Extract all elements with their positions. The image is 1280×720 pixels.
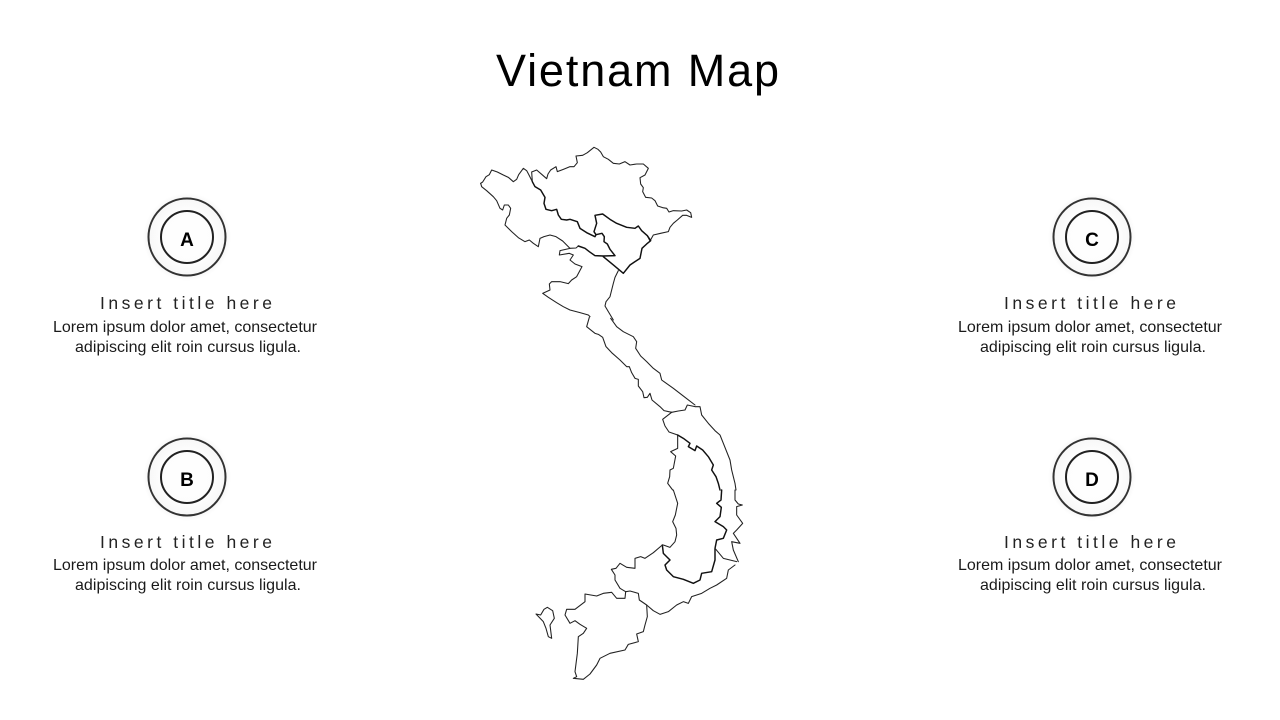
map: Phu Quoc island (536, 607, 554, 638)
text block B (53, 557, 318, 594)
map of Vietnam (481, 147, 743, 679)
map: southern regions (565, 490, 743, 679)
icon: circle D (1048, 433, 1136, 521)
icon: circle C: C (1085, 230, 1099, 251)
text block A (53, 319, 318, 356)
item B (53, 433, 318, 594)
heading D: Insert title here (1004, 532, 1176, 552)
text block D: Lorem ipsum dolor amet, consectetur (958, 557, 1223, 574)
text block A: Lorem ipsum dolor amet, consectetur (53, 319, 318, 336)
heading A: Insert title here (100, 293, 272, 313)
text block D: adipiscing elit roin cursus ligula. (980, 577, 1206, 594)
icon: circle A: A (180, 230, 194, 251)
icon: circle A (143, 193, 231, 281)
heading B: Insert title here (100, 532, 272, 552)
icon: circle B (143, 433, 231, 521)
text block B: adipiscing elit roin cursus ligula. (75, 577, 301, 594)
map: central regions (587, 317, 736, 490)
text block B: Lorem ipsum dolor amet, consectetur (53, 557, 318, 574)
text block A: adipiscing elit roin cursus ligula. (75, 339, 301, 356)
map: northern regions (481, 147, 692, 320)
text block C: adipiscing elit roin cursus ligula. (980, 339, 1206, 356)
item D (958, 433, 1223, 594)
text block C (958, 319, 1223, 356)
title: Vietnam Map (496, 45, 779, 96)
text block C: Lorem ipsum dolor amet, consectetur (958, 319, 1223, 336)
item C (958, 193, 1223, 356)
heading C: Insert title here (1004, 293, 1176, 313)
item A (53, 193, 318, 356)
icon: circle D: D (1085, 470, 1099, 491)
icon: circle C (1048, 193, 1136, 281)
icon: circle B: B (180, 470, 194, 491)
text block D (958, 557, 1223, 594)
